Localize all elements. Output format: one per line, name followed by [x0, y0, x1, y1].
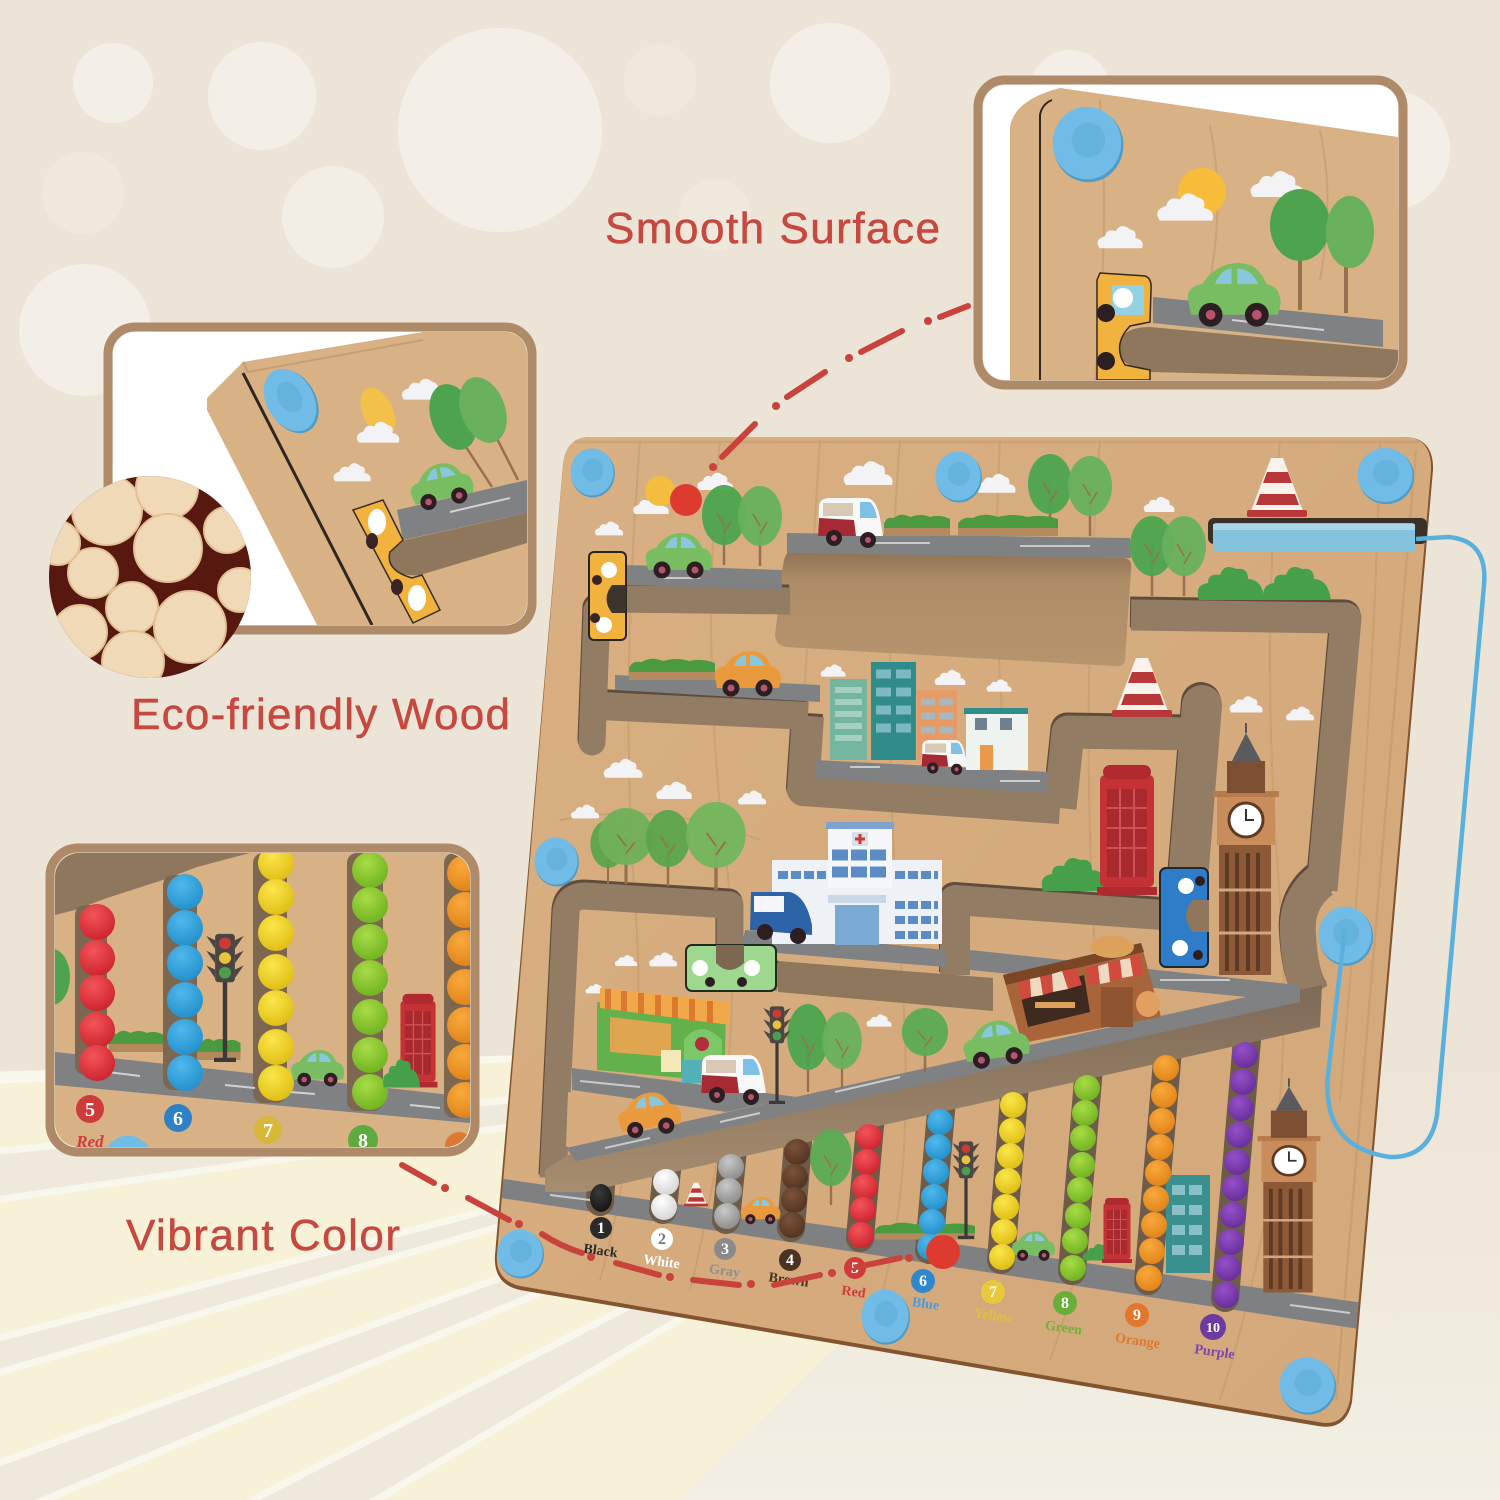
maze board [488, 437, 1484, 1427]
trees [590, 454, 1206, 1205]
colour labels: Red [840, 1283, 867, 1302]
colour labels: Green [1044, 1319, 1083, 1339]
bushes and hedges [629, 515, 1331, 1260]
close-up number badges [76, 1095, 467, 1147]
heading: eco-friendly wood: Eco-friendly Wood [131, 690, 510, 739]
phone box and big ben [1097, 723, 1279, 975]
building: grocery [597, 988, 730, 1083]
beads [590, 1042, 1258, 1308]
close-up tree fragment [55, 949, 70, 1005]
heading: vibrant color: Vibrant Color [126, 1211, 400, 1260]
leader line: vibrant color [402, 1165, 960, 1288]
close-up wood board [1010, 88, 1398, 380]
close-up slots [75, 853, 474, 1118]
close-up traffic light [206, 934, 244, 1062]
close-up hedges [108, 1031, 164, 1052]
grey road lane marks [550, 543, 1350, 1313]
callout: vibrant color close-up [46, 844, 480, 1156]
colour labels: Blue [911, 1295, 940, 1314]
building: bakery [1003, 936, 1161, 1043]
close-up peg [1053, 107, 1123, 182]
sun [645, 476, 675, 506]
colour labels: Brown [768, 1270, 810, 1291]
close-up number badges: 5 [85, 1099, 95, 1121]
traffic lights [763, 1006, 980, 1239]
close-up trees [1298, 260, 1348, 313]
colour labels: 10 [1206, 1321, 1220, 1336]
floor sun rays [0, 1035, 1500, 1500]
leader line: smooth surface [670, 306, 968, 516]
close-up phone box [398, 994, 438, 1087]
maze channels [545, 552, 1346, 1192]
close-up number badges: 8 [358, 1130, 368, 1152]
callout: smooth surface close-up [978, 80, 1403, 385]
pull-out vehicles: yellow bus, blue bus, green bus [589, 552, 1209, 991]
close-up bus [353, 500, 440, 623]
colour labels: 4 [786, 1252, 794, 1269]
colour labels: 7 [989, 1284, 997, 1301]
buildings: city block [830, 662, 1028, 770]
colour labels: 6 [919, 1273, 927, 1290]
colour labels: Black [582, 1242, 619, 1261]
close-up bus [1097, 273, 1151, 380]
close-up tilted board [207, 332, 527, 625]
close-up car [1188, 263, 1281, 327]
callout frame [50, 848, 475, 1152]
close-up peg [108, 1136, 149, 1147]
colour labels: White [642, 1253, 681, 1273]
bead slots [600, 1040, 1247, 1298]
colour labels: 5 [851, 1260, 859, 1277]
road shelves [566, 533, 1300, 1161]
wand wire [1327, 537, 1484, 1157]
colour labels: Purple [1193, 1342, 1236, 1363]
callout: eco-friendly wood close-up [108, 327, 532, 630]
colour labels: 9 [1133, 1307, 1141, 1324]
close-up car [410, 463, 474, 510]
close-up road marks [107, 1072, 440, 1108]
heading: smooth surface: Smooth Surface [605, 204, 940, 253]
close-up sun and clouds [360, 388, 396, 432]
close-up peg [264, 368, 319, 434]
close-up road [55, 1052, 470, 1123]
small scene along bottom road [1102, 1078, 1320, 1292]
colour labels: 1 [597, 1220, 605, 1237]
blue pegs [497, 448, 1414, 1415]
close-up car [291, 1050, 344, 1086]
close-up number badges: 7 [263, 1120, 273, 1142]
colour labels: Gray [708, 1262, 741, 1281]
callout frame [978, 80, 1403, 385]
close-up trees [466, 440, 519, 488]
close-up beads [79, 845, 483, 1118]
background bokeh circles [19, 23, 1450, 396]
close-up bush [383, 1059, 420, 1087]
colour labels: Yellow [973, 1306, 1015, 1327]
colour labels: Orange [1114, 1331, 1161, 1352]
magnetic wand in slot [1208, 518, 1427, 552]
photo: stacked wooden logs [49, 476, 251, 678]
board edge [495, 437, 1433, 1427]
clouds [571, 461, 1314, 1027]
colour labels: 8 [1061, 1295, 1069, 1312]
board face [497, 437, 1431, 1423]
vehicles on the roads [615, 498, 1055, 1261]
close-up number badges: Red [75, 1132, 104, 1151]
colour labels: 2 [658, 1231, 666, 1248]
cones [684, 458, 1307, 1206]
close-up channel [1117, 327, 1398, 378]
close-up number badges: 6 [173, 1108, 183, 1130]
vehicle: blue ambulance [750, 892, 812, 944]
building: hospital [772, 822, 942, 945]
close-up road and channel [397, 480, 527, 540]
colour labels [582, 1217, 1236, 1363]
colour labels: 3 [721, 1241, 729, 1258]
close-up road [1153, 297, 1383, 347]
callout frame [108, 327, 532, 630]
bottom road [488, 1177, 1370, 1330]
close-up channel corner [55, 853, 250, 915]
close-up sun and clouds [1178, 168, 1226, 216]
